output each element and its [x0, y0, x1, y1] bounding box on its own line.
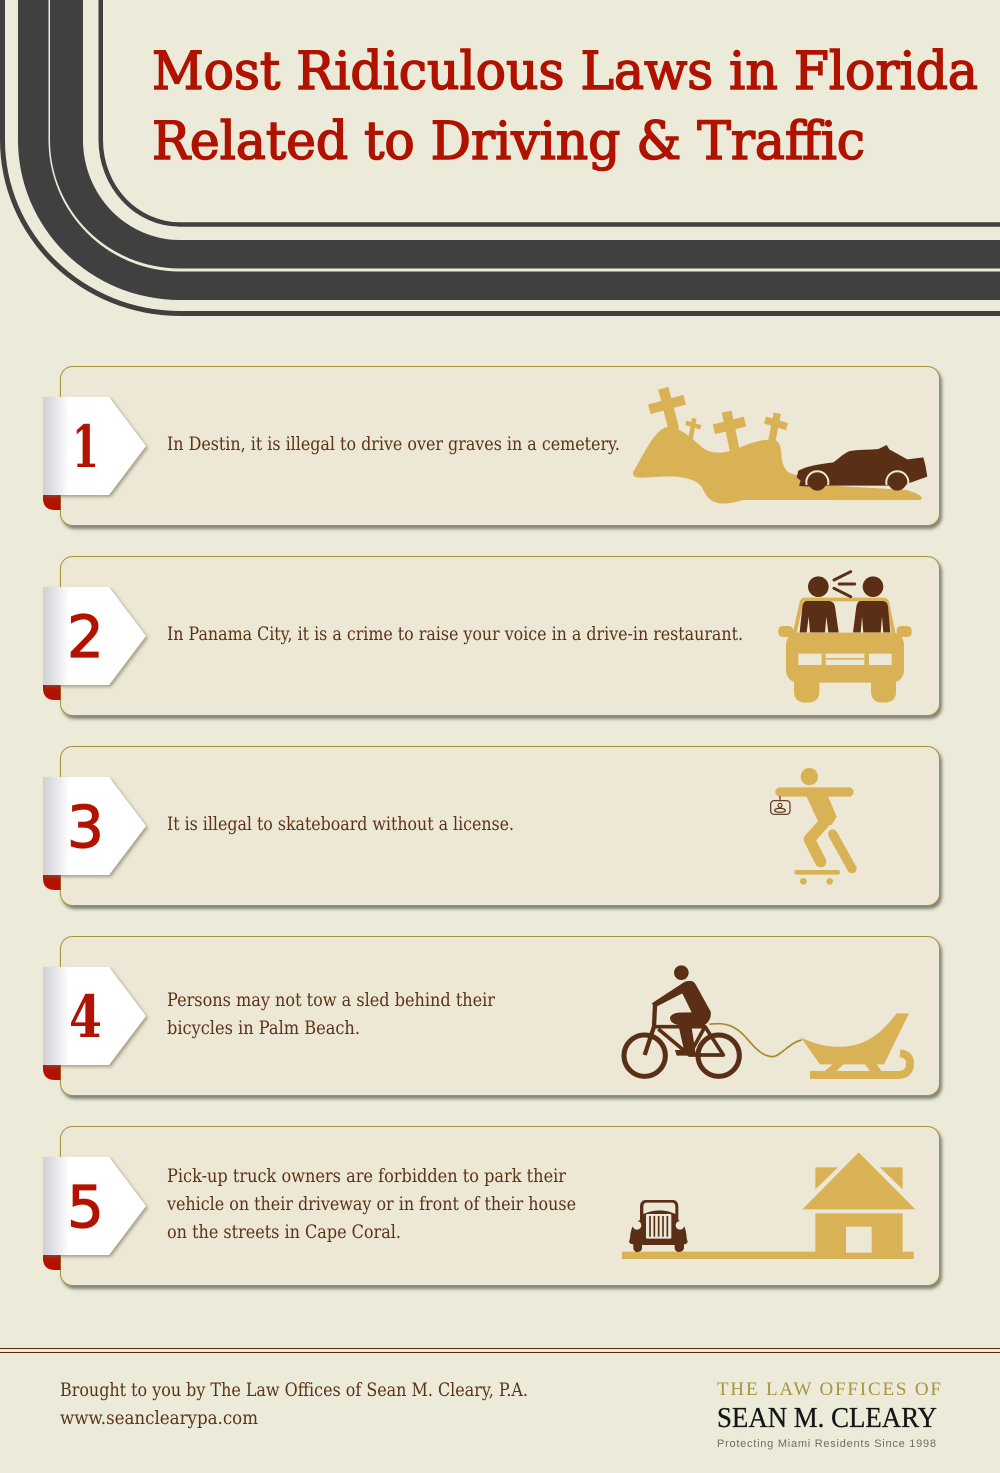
law text 4: bicycles in Palm Beach. — [167, 1018, 360, 1039]
title: Related to Driving & Traffic — [152, 112, 865, 172]
law text 2: In Panama City, it is a crime to raise your voice in a drive-in restaurant. — [167, 624, 743, 645]
law text 5: Pick-up truck owners are forbidden to park their — [167, 1166, 566, 1187]
number flag — [43, 1157, 146, 1255]
red fold — [43, 870, 60, 890]
footer credit — [60, 1380, 528, 1429]
footer credit: www.seanclearypa.com — [60, 1408, 258, 1429]
number 5: 5 — [67, 1173, 104, 1241]
number 3: 3 — [67, 793, 104, 861]
number 2: 2 — [67, 603, 104, 671]
panel: law 3 — [43, 746, 940, 906]
title — [152, 42, 978, 172]
panel: law 2 — [43, 556, 940, 716]
icon: skateboarder with license — [771, 768, 852, 885]
panel: law 5 — [43, 1126, 940, 1286]
logo: law offices: Protecting Miami Residents Since 1998 — [717, 1438, 936, 1450]
law text 5 — [166, 1166, 576, 1243]
red fold — [43, 490, 60, 510]
red fold — [43, 1060, 60, 1080]
law text 1: In Destin, it is illegal to drive over graves in a cemetery. — [167, 434, 620, 455]
panel: law 1 — [43, 366, 940, 526]
footer rules — [0, 1348, 1000, 1352]
law text 5: on the streets in Cape Coral. — [167, 1222, 401, 1243]
red fold — [43, 1250, 60, 1270]
number flag — [43, 587, 146, 685]
icon: cemetery and car — [633, 388, 927, 504]
logo: law offices — [717, 1379, 941, 1450]
law text 4: Persons may not tow a sled behind their — [167, 990, 495, 1011]
law text 4 — [167, 990, 495, 1039]
number flag — [43, 967, 146, 1065]
icon: car with shouting passengers — [778, 572, 912, 703]
title: Most Ridiculous Laws in Florida — [152, 42, 978, 102]
law text 3: It is illegal to skateboard without a license. — [167, 814, 514, 835]
number 4: 4 — [69, 983, 102, 1051]
icon: cyclist towing a sled — [624, 965, 910, 1076]
road graphic — [0, 0, 1000, 316]
law text 5: vehicle on their driveway or in front of their house — [166, 1194, 576, 1215]
logo: law offices: SEAN M. CLEARY — [717, 1403, 937, 1434]
number flag — [43, 397, 146, 495]
number flag — [43, 777, 146, 875]
logo: law offices: THE LAW OFFICES OF — [717, 1379, 941, 1400]
red fold — [43, 680, 60, 700]
number 1: 1 — [72, 413, 99, 481]
icon: truck parked away from house — [622, 1152, 915, 1259]
footer credit: Brought to you by The Law Offices of Sean M. Cleary, P.A. — [60, 1380, 528, 1401]
panel: law 4 — [43, 936, 940, 1096]
